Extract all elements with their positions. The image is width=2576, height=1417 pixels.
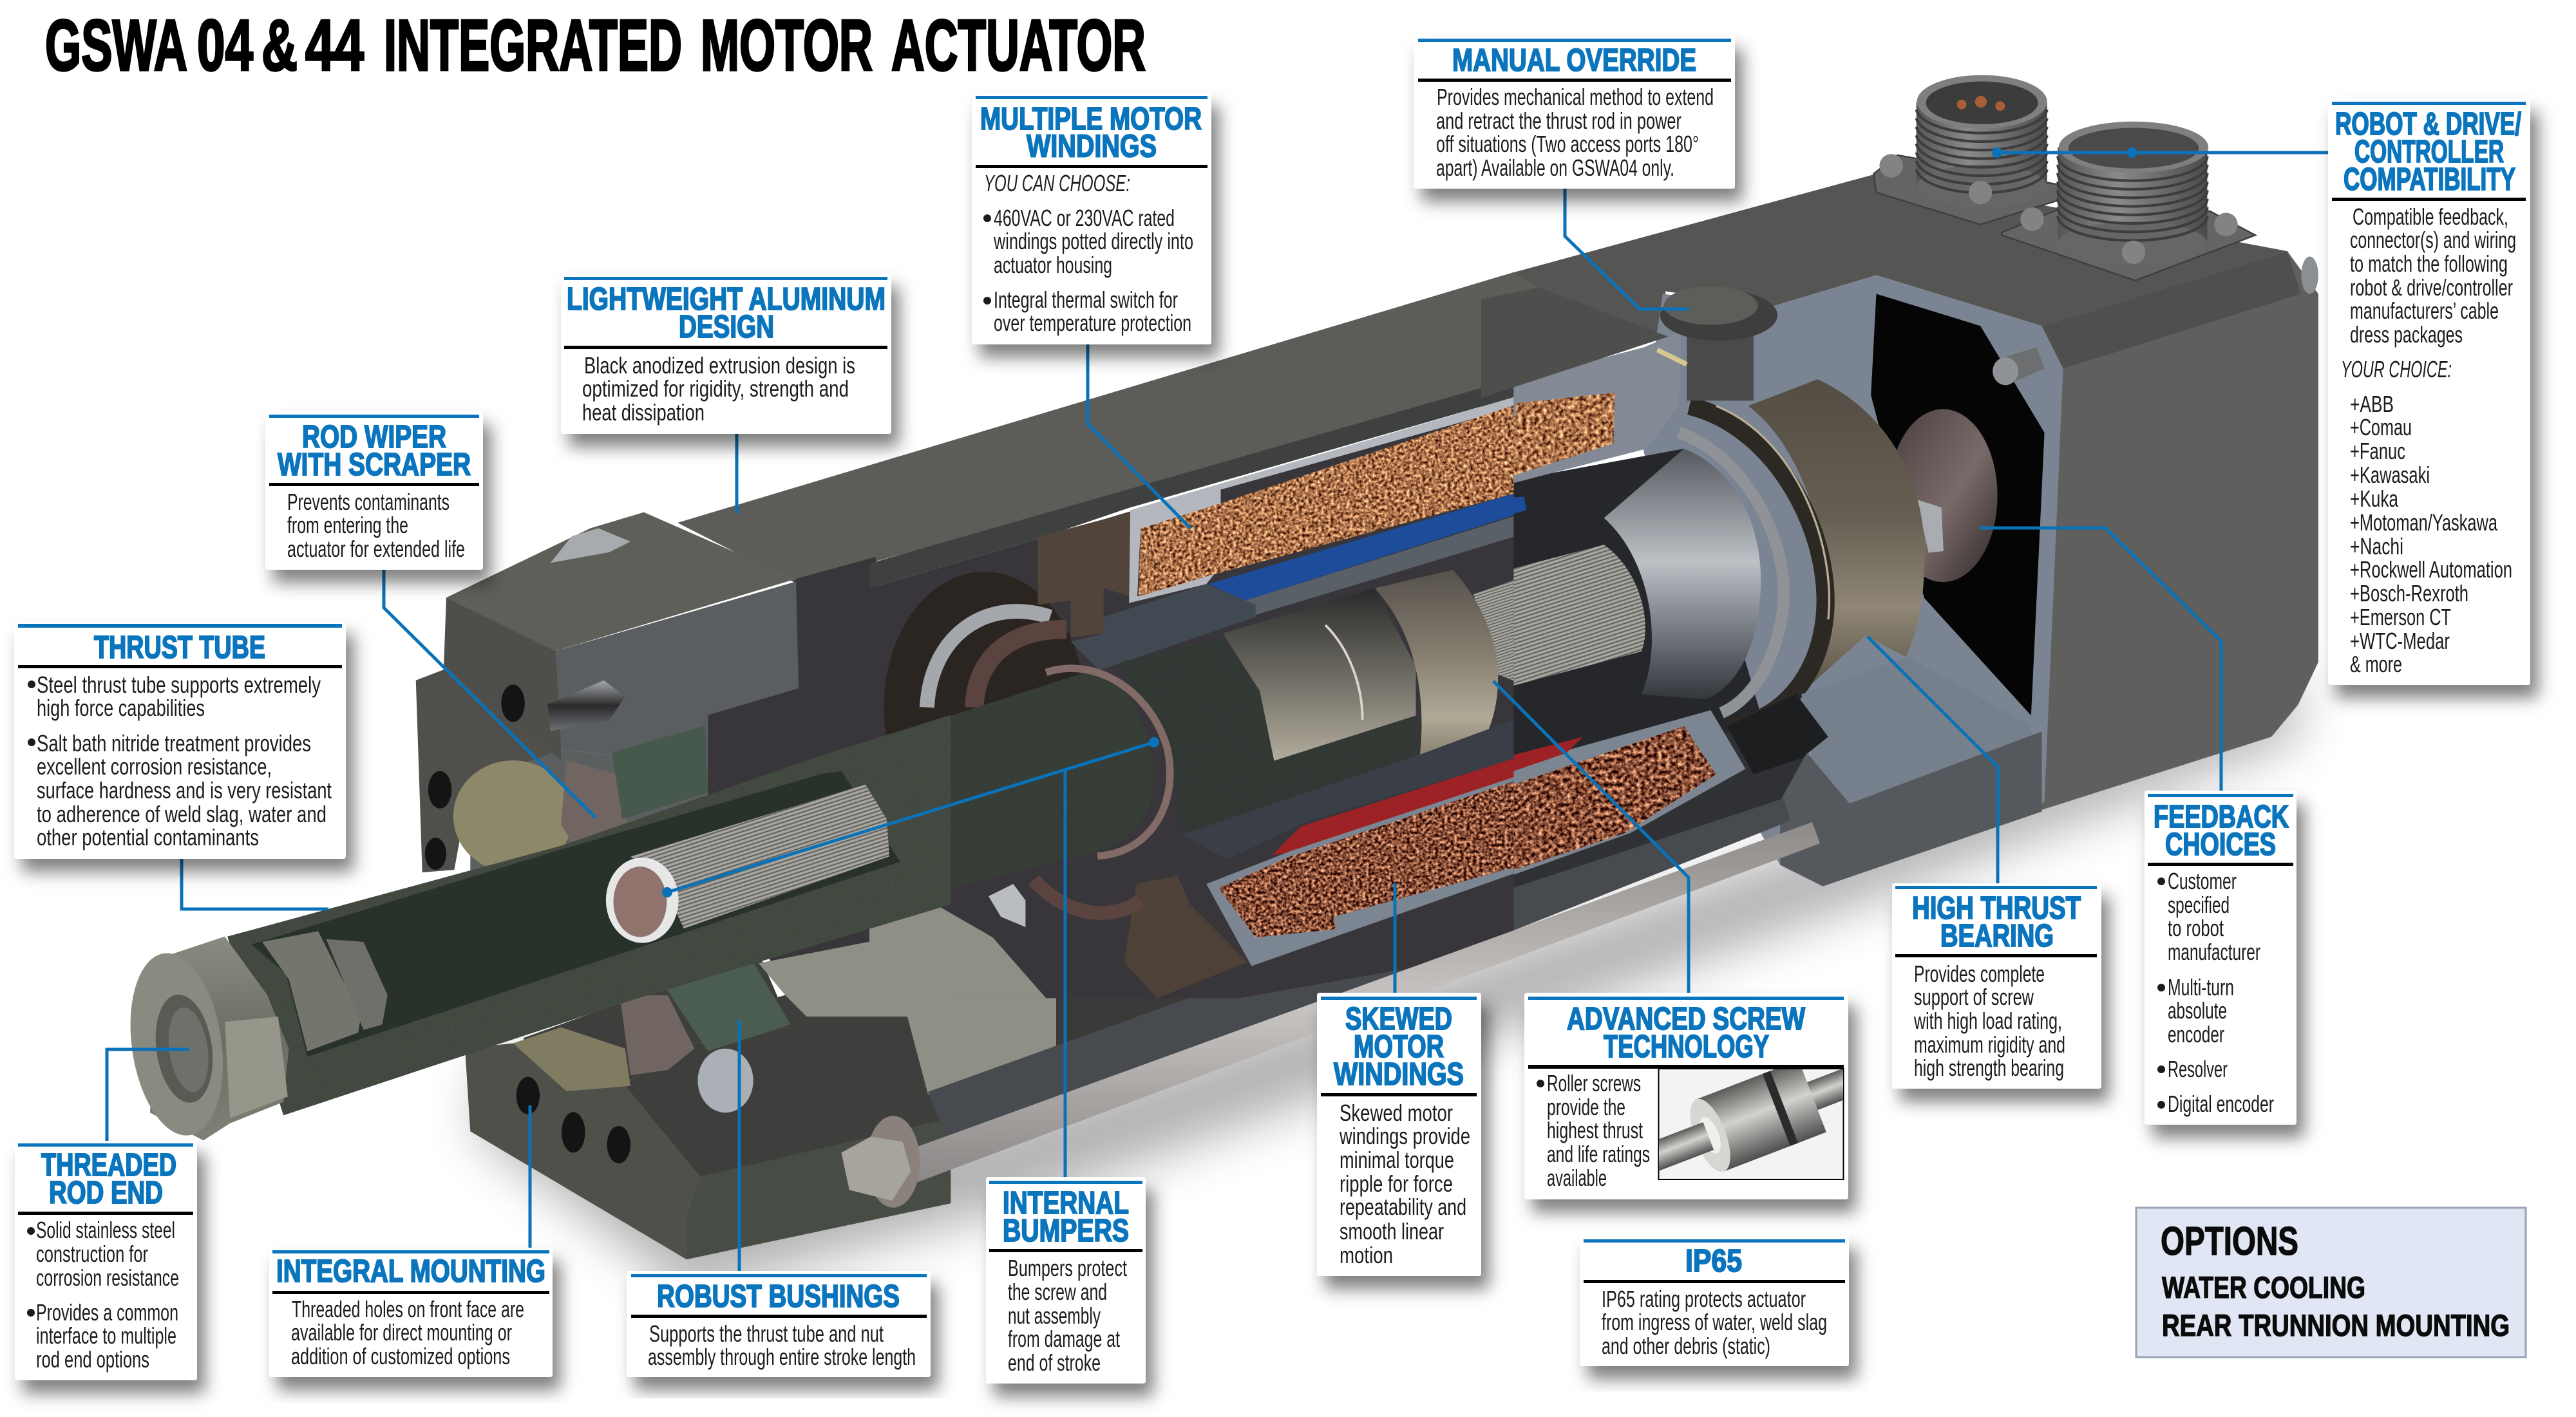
- translucent sleeve: [1071, 584, 1256, 670]
- text block: corrosion resistance: [36, 1264, 179, 1291]
- text block: +Motoman/Yaskawa: [2350, 509, 2498, 536]
- silver fastener: [697, 1049, 753, 1112]
- lower side band: [928, 798, 1790, 1152]
- heading: ROD WIPER: [302, 420, 446, 455]
- text block: end of stroke: [1008, 1349, 1101, 1376]
- options heading: OPTIONS: [2161, 1219, 2298, 1264]
- text block: Steel thrust tube supports extremely: [37, 671, 321, 698]
- bearing ring: [1689, 406, 1829, 726]
- upper green bushing: [612, 726, 708, 819]
- text block: +Kawasaki: [2350, 462, 2430, 488]
- text block: actuator housing: [994, 252, 1112, 278]
- gold pin: [1658, 350, 1687, 364]
- silver drum: [1604, 449, 1761, 700]
- lower cut floor: [1801, 657, 2041, 854]
- text block: from entering the: [287, 512, 408, 538]
- connector 2: [2058, 122, 2208, 265]
- text block: YOUR CHOICE:: [2341, 356, 2452, 382]
- panel: feedback choices: [2145, 791, 2297, 1125]
- heading: [1567, 1002, 1806, 1064]
- text block: Multi-turn: [2168, 974, 2234, 1000]
- text block: [983, 170, 1193, 336]
- title: MOTOR: [701, 5, 873, 86]
- heading: WINDINGS: [1334, 1057, 1464, 1092]
- lower stator frame: [1206, 777, 1513, 966]
- upper copper end: [1481, 393, 1615, 486]
- block top face: [446, 512, 796, 651]
- text block: and retract the thrust rod in power: [1436, 108, 1681, 134]
- text block: with high load rating,: [1913, 1008, 2062, 1034]
- panel: manual override: [1414, 36, 1735, 189]
- nut highlight: [1325, 625, 1363, 720]
- threaded shaft: [1473, 580, 1513, 680]
- red strip end: [1481, 737, 1583, 782]
- text block: +Bosch-Rexroth: [2350, 580, 2468, 606]
- manual override cap: [1660, 286, 1777, 400]
- heading: MOTOR: [1354, 1029, 1444, 1064]
- block left face: [446, 597, 561, 760]
- panel: robust bushings: [627, 1271, 931, 1377]
- text block: from damage at: [1008, 1326, 1120, 1352]
- lower holes: [516, 1077, 630, 1163]
- lower bay dark: [1056, 995, 1262, 1056]
- lower wiper disc: [513, 1028, 630, 1091]
- heading: [278, 420, 471, 482]
- red strip: [1272, 758, 1513, 855]
- heading: DESIGN: [679, 310, 774, 344]
- text block: addition of customized options: [291, 1343, 510, 1369]
- lower block bevel: [687, 1118, 951, 1259]
- heading: WITH SCRAPER: [278, 447, 471, 482]
- text block: [1436, 84, 1714, 181]
- text block: Black anodized extrusion design is: [584, 352, 855, 379]
- text block: [1913, 961, 2065, 1081]
- text block: [1008, 1255, 1127, 1376]
- text block: to match the following: [2350, 250, 2508, 277]
- long housing rear edge: [1481, 288, 1668, 398]
- tie rod: [902, 822, 1820, 1183]
- upper wiper clamp: [561, 760, 628, 851]
- bore surface: [759, 926, 951, 1017]
- panel: rod wiper with scraper: [265, 411, 483, 570]
- heading: [1003, 1186, 1129, 1248]
- text block: [287, 489, 465, 562]
- text block: apart) Available on GSWA04 only.: [1436, 155, 1674, 181]
- drum rim: [1679, 433, 1784, 713]
- text block: [648, 1320, 916, 1370]
- lower block front face: [465, 1043, 700, 1259]
- text block: Prevents contaminants: [287, 489, 450, 515]
- text block: and other debris (static): [1602, 1333, 1770, 1359]
- bronze collar: [1375, 570, 1498, 755]
- encoder clip: [1917, 500, 1944, 553]
- text block: +Kuka: [2350, 485, 2399, 512]
- panel: options: [2136, 1208, 2526, 1357]
- text block: construction for: [36, 1241, 148, 1267]
- text block: & more: [2350, 651, 2402, 677]
- text block: smooth linear: [1340, 1218, 1444, 1244]
- text block: [27, 1217, 179, 1373]
- text block: +Nachi: [2350, 533, 2403, 559]
- text block: to adherence of weld slag, water and: [37, 801, 327, 827]
- text block: off situations (Two access ports 180°: [1436, 131, 1699, 157]
- text block: [582, 352, 855, 426]
- panel: robot and drive compatibility: [2328, 99, 2530, 685]
- text block: [1537, 1070, 1650, 1191]
- rear block side face: [2036, 251, 2318, 812]
- text block: Solid stainless steel: [36, 1217, 175, 1243]
- block right face: [556, 581, 799, 755]
- text block: motion: [1340, 1242, 1393, 1268]
- text block: interface to multiple: [36, 1322, 176, 1349]
- ground shadow: [477, 676, 2306, 1294]
- text block: repeatability and: [1340, 1194, 1466, 1220]
- screw end bumper: [606, 858, 679, 943]
- options list: WATER COOLING: [2162, 1270, 2365, 1304]
- blue strip end: [1481, 496, 1526, 523]
- text block: Resolver: [2168, 1056, 2228, 1082]
- text block: available: [1547, 1165, 1607, 1191]
- heading: FEEDBACK: [2154, 800, 2289, 834]
- text block: Customer: [2168, 868, 2237, 894]
- text block: excellent corrosion resistance,: [37, 753, 272, 780]
- text block: Digital encoder: [2168, 1091, 2274, 1117]
- rear housing section: [1481, 174, 2318, 897]
- leader line: internal bumpers: [662, 737, 1159, 1180]
- cut face: [1642, 275, 2063, 887]
- green nut housing: [1120, 637, 1420, 834]
- heading: [567, 282, 886, 344]
- connector bolts 2: [2020, 207, 2238, 264]
- leader line: robot compatibility: [1992, 147, 2328, 158]
- lower copper end: [1481, 726, 1716, 881]
- heading: INTEGRAL MOUNTING: [276, 1254, 545, 1289]
- heading: [2154, 800, 2289, 862]
- text block: Bumpers protect: [1008, 1255, 1127, 1281]
- connector bolts 1: [1879, 154, 1992, 204]
- filler behind lower bushing: [524, 953, 791, 1086]
- heading: [41, 1148, 176, 1210]
- heading: BEARING: [1940, 919, 2054, 953]
- heading: WINDINGS: [1027, 129, 1157, 164]
- heading: ROBUST BUSHINGS: [657, 1279, 900, 1314]
- leader line: manual override: [1565, 189, 1689, 309]
- text block: other potential contaminants: [37, 824, 259, 850]
- text block: +Rockwell Automation: [2350, 556, 2512, 583]
- title: GSWA: [45, 5, 187, 86]
- tie rod nut: [841, 1116, 920, 1208]
- text block: windings potted directly into: [993, 228, 1193, 254]
- threaded shaft rear: [1481, 545, 1645, 694]
- text block: Compatible feedback,: [2353, 203, 2508, 230]
- text block: +Comau: [2350, 414, 2412, 440]
- screw: [630, 784, 889, 928]
- connector base 2: [2002, 209, 2255, 281]
- front thrust tube and blocks: [120, 512, 951, 1208]
- lower block slanted face: [625, 953, 951, 1177]
- text block: available for direct mounting or: [291, 1319, 512, 1346]
- leader line: thrust tube: [182, 859, 328, 909]
- pin: [1993, 347, 2045, 385]
- lower seal ring: [1034, 880, 1141, 913]
- heading: [2335, 107, 2521, 197]
- text block: YOU CAN CHOOSE:: [984, 170, 1130, 196]
- heading: HIGH THRUST: [1912, 891, 2081, 926]
- text block: the screw and: [1008, 1279, 1107, 1305]
- upper copper winding: [1139, 406, 1513, 596]
- text block: Provides mechanical method to extend: [1437, 84, 1714, 110]
- interior backdrop: [869, 397, 1513, 998]
- panel: integral mounting: [269, 1248, 553, 1377]
- text block: windings provide: [1339, 1123, 1470, 1149]
- text block: manufacturer: [2168, 939, 2260, 965]
- panel: high thrust bearing: [1892, 883, 2101, 1089]
- heading: [980, 102, 1202, 164]
- upper holes: [425, 684, 525, 870]
- text block: from ingress of water, weld slag: [1602, 1309, 1827, 1335]
- text block: highest thrust: [1547, 1117, 1643, 1143]
- text block: Integral thermal switch for: [994, 286, 1178, 313]
- central cutaway: [869, 379, 1513, 998]
- heading: [1334, 1002, 1464, 1092]
- rear block top face: [1481, 174, 2287, 339]
- filler behind wiper: [470, 715, 708, 872]
- text block: minimal torque: [1340, 1147, 1454, 1173]
- text block: heat dissipation: [582, 399, 705, 426]
- text block: high force capabilities: [37, 695, 205, 721]
- lower interior band: [1182, 720, 1513, 859]
- leader line: robust bushings: [738, 1020, 741, 1275]
- title: &: [261, 5, 298, 86]
- leader line: rod wiper: [384, 570, 596, 818]
- illustration: cutaway actuator: [120, 75, 2318, 1294]
- heading: CHOICES: [2165, 827, 2276, 862]
- text block: Salt bath nitride treatment provides: [37, 730, 311, 756]
- silver clip: [989, 884, 1025, 927]
- text block: rod end options: [36, 1346, 149, 1373]
- panel: IP65: [1580, 1235, 1849, 1366]
- text block: support of screw: [1914, 984, 2034, 1010]
- text block: Supports the thrust tube and nut: [649, 1320, 884, 1347]
- text block: [1602, 1286, 1827, 1359]
- heading: LIGHTWEIGHT ALUMINUM: [567, 282, 886, 317]
- brown seal ring: [974, 629, 1066, 708]
- options list: [2162, 1270, 2510, 1342]
- threaded rod end: [120, 937, 289, 1141]
- text block: +Emerson CT: [2350, 604, 2451, 630]
- heading: CONTROLLER: [2354, 135, 2504, 169]
- text block: specified: [2168, 892, 2230, 918]
- text block: Provides complete: [1914, 961, 2045, 987]
- lower rear block: [1780, 731, 2041, 887]
- front block lower: [465, 953, 951, 1259]
- text block: dress packages: [2350, 321, 2463, 348]
- black cavity: [1871, 294, 2045, 715]
- panel: internal bumpers: [986, 1177, 1146, 1384]
- image: roller screw: [1658, 1068, 1844, 1180]
- heading: THREADED: [41, 1148, 176, 1183]
- upper wiper disc: [453, 760, 573, 872]
- text block: [2157, 868, 2274, 1117]
- tube slot: [251, 771, 900, 1056]
- text block: ripple for force: [1340, 1170, 1453, 1197]
- panel: lightweight aluminum design: [561, 274, 891, 434]
- heading: INTERNAL: [1003, 1186, 1129, 1221]
- bore surface: [869, 906, 1046, 998]
- text block: high strength bearing: [1914, 1055, 2064, 1081]
- bumper o-ring: [1046, 668, 1170, 856]
- text block: IP65 rating protects actuator: [1602, 1286, 1806, 1312]
- text block: 460VAC or 230VAC rated: [994, 205, 1175, 231]
- heading: BUMPERS: [1003, 1214, 1129, 1248]
- heading: [1912, 891, 2081, 953]
- text block: +ABB: [2350, 391, 2394, 417]
- slot end block: [262, 931, 361, 1051]
- text block: +WTC-Medar: [2350, 628, 2450, 654]
- leader line: feedback choices: [1980, 528, 2221, 794]
- heading: MULTIPLE MOTOR: [980, 102, 1202, 136]
- lower wiper clamp: [620, 995, 694, 1075]
- text block: manufacturers’ cable: [2350, 297, 2499, 324]
- heading: MANUAL OVERRIDE: [1452, 43, 1696, 78]
- leader line: integral mounting: [528, 1105, 532, 1249]
- leader line: lightweight aluminum: [735, 434, 738, 513]
- lower stator frame: [1481, 710, 1745, 887]
- grey band: [1245, 516, 1513, 615]
- text block: Provides a common: [36, 1299, 178, 1326]
- rear interior: [1481, 449, 1764, 774]
- silver bolt: [548, 680, 625, 731]
- leader line: threaded rod end: [107, 1049, 189, 1143]
- title: ACTUATOR: [891, 5, 1146, 86]
- text block: surface hardness and is very resistant: [37, 777, 332, 803]
- connector base 1: [1873, 155, 2058, 225]
- heading: IP65: [1685, 1244, 1742, 1279]
- text block: absolute: [2168, 997, 2227, 1024]
- thrust tube section: [869, 670, 1153, 908]
- heading: ADVANCED SCREW: [1567, 1002, 1806, 1037]
- silver nut: [1223, 588, 1416, 761]
- manual override knob and connectors: [1481, 75, 2255, 400]
- text block: Threaded holes on front face are: [292, 1296, 524, 1322]
- recess plate: [884, 572, 1085, 843]
- housing edge: [869, 379, 1513, 588]
- silver seal ring: [927, 612, 1050, 708]
- text block: +Fanuc: [2350, 438, 2405, 464]
- panel: multiple motor windings: [972, 93, 1211, 344]
- text block: to robot: [2168, 915, 2224, 941]
- connector 1: [1917, 75, 2047, 207]
- blue strip: [1208, 494, 1513, 601]
- panel: threaded rod end: [15, 1141, 197, 1380]
- heading: THRUST TUBE: [94, 630, 265, 665]
- text block: optimized for rigidity, strength and: [582, 375, 849, 402]
- panel: advanced screw technology: [1524, 993, 1908, 1203]
- text block: Skewed motor: [1340, 1100, 1453, 1126]
- thrust tube: [227, 715, 951, 1115]
- lower notch: [1727, 694, 1828, 774]
- title: [45, 5, 1146, 86]
- heading: SKEWED: [1345, 1002, 1452, 1037]
- text block: actuator for extended life: [287, 536, 465, 562]
- leader line: advanced screw: [1493, 681, 1689, 997]
- lower clamp: [1124, 876, 1247, 998]
- lower copper winding: [1218, 782, 1513, 937]
- leader line: multiple motor windings: [1088, 344, 1191, 529]
- panel: thrust tube: [14, 621, 346, 859]
- text block: maximum rigidity and: [1914, 1031, 2065, 1058]
- housing top face: [677, 272, 1668, 583]
- text block: [1339, 1100, 1470, 1268]
- text block: nut assembly: [1008, 1302, 1101, 1329]
- lower bay bore: [902, 995, 1056, 1094]
- upper clamp: [1038, 512, 1130, 637]
- upper stator frame: [1129, 397, 1513, 603]
- title: 04: [197, 5, 253, 86]
- title: INTEGRATED: [384, 5, 682, 86]
- lower backdrop: [1481, 726, 1812, 897]
- front plate: [416, 597, 561, 872]
- upper bolt head: [551, 528, 630, 563]
- leader line: skewed motor windings: [1394, 883, 1396, 995]
- panel: skewed motor windings: [1317, 993, 1481, 1276]
- text block: Roller screws: [1547, 1070, 1641, 1096]
- text block: provide the: [1547, 1094, 1625, 1120]
- high thrust bearing: [1748, 379, 1924, 684]
- text block: over temperature protection: [994, 310, 1191, 336]
- upper stator end: [1481, 331, 1681, 491]
- text block: and life ratings: [1547, 1141, 1650, 1167]
- heading: ROD END: [49, 1176, 163, 1210]
- encoder: [1889, 409, 1998, 582]
- slot end block step: [326, 939, 388, 1030]
- heading: TECHNOLOGY: [1604, 1029, 1769, 1064]
- backdrop left of cutaway: [702, 557, 876, 1004]
- title: 44: [305, 5, 364, 86]
- text block: [28, 671, 332, 850]
- text block: assembly through entire stroke length: [648, 1344, 916, 1370]
- text block: [2341, 203, 2516, 677]
- text block: [291, 1296, 524, 1369]
- text block: encoder: [2168, 1021, 2224, 1047]
- lower green bushing: [665, 958, 791, 1051]
- leader line: high thrust bearing: [1868, 637, 1998, 885]
